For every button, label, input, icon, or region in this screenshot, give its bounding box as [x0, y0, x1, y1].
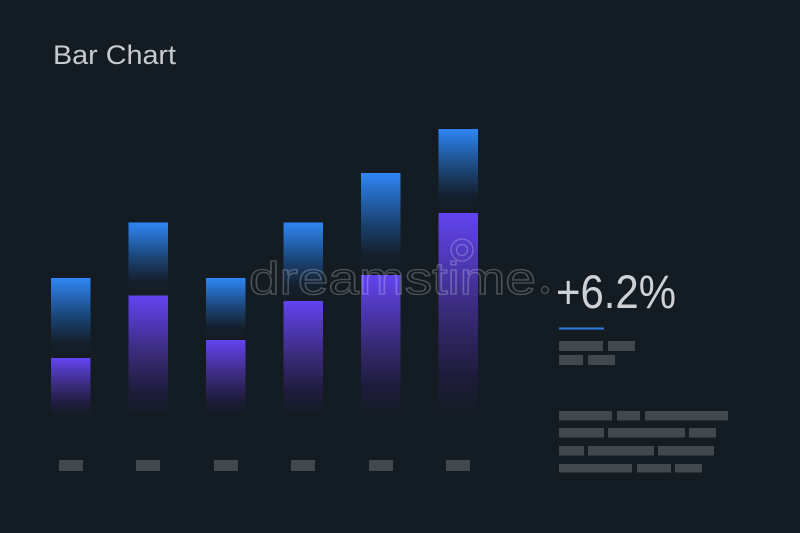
metric accent line — [559, 328, 604, 330]
watermark — [249, 239, 548, 304]
bar column 1 — [51, 278, 90, 415]
bar column 5 — [361, 173, 400, 415]
bar column 2 — [128, 222, 168, 415]
bar chart — [51, 129, 478, 415]
bar column 3 — [206, 278, 246, 415]
title: Bar Chart — [53, 40, 177, 70]
bar column 4 — [284, 222, 323, 415]
watermark: dreamstime — [249, 253, 536, 304]
metric value: +6.2% — [556, 265, 676, 318]
body text placeholder — [559, 411, 728, 472]
bar column 6 — [438, 129, 478, 415]
metric caption placeholder — [559, 341, 635, 365]
axis label placeholders — [59, 460, 470, 471]
